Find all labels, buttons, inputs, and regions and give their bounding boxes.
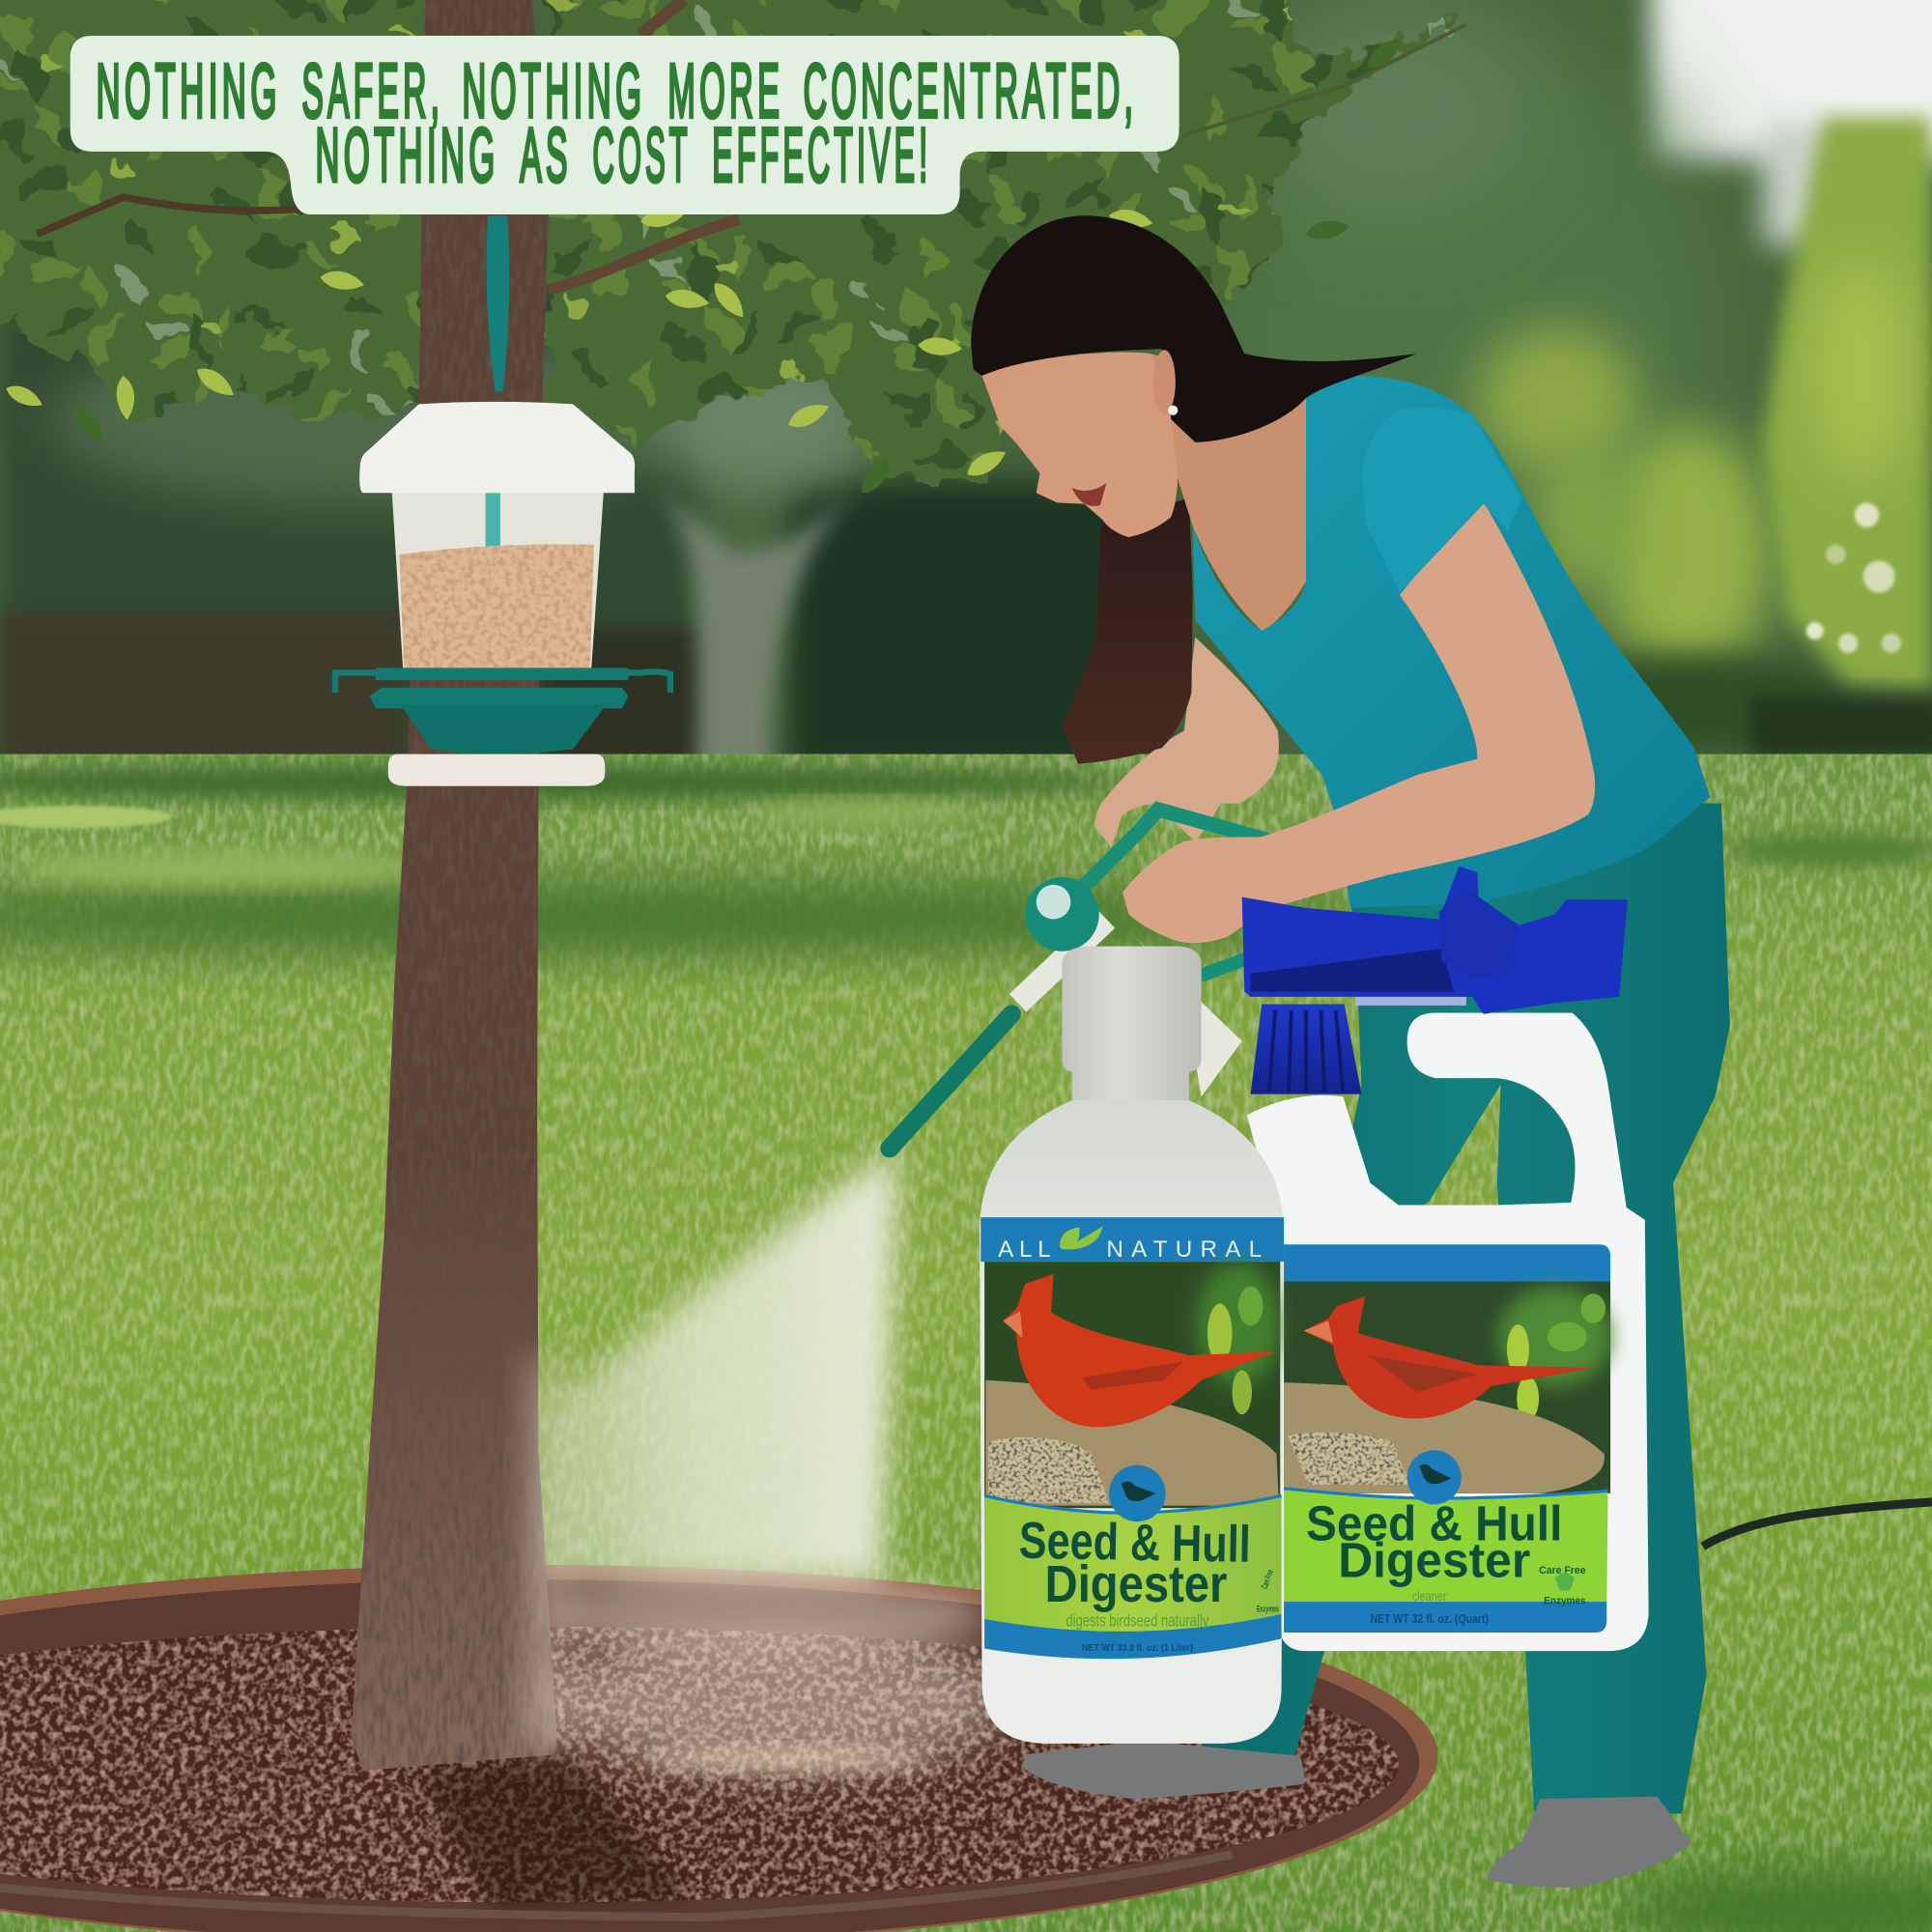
raised arm and hand (1122, 501, 1595, 943)
tree trunk (352, 0, 557, 1771)
lime hedge at right (1762, 117, 1932, 690)
feeder lid (359, 402, 635, 493)
shirt sleeve (1361, 408, 1521, 593)
bottle label: Care Free (1260, 1568, 1275, 1590)
headline text: NOTHING (462, 47, 645, 133)
all natural text: ALL (998, 1236, 1056, 1263)
face (982, 353, 1178, 537)
label heading: Seed & Hull (1306, 1495, 1562, 1550)
quart jug bottle (1242, 867, 1649, 1651)
text: CONCENTRATED, (804, 47, 1137, 133)
headline text (96, 47, 1137, 198)
tree foliage (0, 0, 1466, 498)
jug label: Enzymes (1544, 1596, 1586, 1607)
bottle cap (1062, 947, 1202, 1103)
smile (1072, 483, 1106, 506)
headline text: SAFER, (301, 47, 443, 133)
bird feeder (335, 215, 670, 786)
cardinal (1303, 1296, 1595, 1418)
woman spraying (890, 215, 1932, 1888)
bottle label: NATURAL (1106, 1236, 1269, 1263)
jug label: NET WT 32 fl. oz. (Quart) (1370, 1611, 1489, 1626)
centre foliage mass (542, 0, 1466, 480)
seed fill (399, 544, 594, 668)
background: blurred garden (0, 0, 1932, 813)
bottle body (980, 1100, 1284, 1744)
cardinal (1003, 1274, 1275, 1427)
bottle label (980, 1217, 1284, 1659)
long hair (1062, 497, 1193, 764)
bird badge (1109, 1465, 1166, 1521)
jug label: Digester (1338, 1533, 1530, 1588)
green tray (335, 671, 670, 693)
headline text: MORE (668, 47, 783, 133)
headline banner (71, 36, 1179, 214)
pants (1202, 801, 1730, 1814)
upper hair (971, 215, 1417, 442)
headline text: NOTHING (316, 111, 499, 197)
white base disc (388, 754, 605, 786)
label heading: Seed & Hull (1018, 1513, 1251, 1574)
headline text: COST (593, 111, 692, 197)
lower blue band (984, 1614, 1282, 1659)
blue neck collar (1251, 1005, 1361, 1094)
left foliage mass (0, 0, 425, 425)
spray mist (524, 1149, 1010, 1772)
mulch (0, 1627, 1399, 1902)
front rim highlight (0, 1855, 1233, 1918)
label leaves (1498, 1288, 1611, 1386)
label picture (984, 1262, 1280, 1508)
shoes (1023, 1741, 1304, 1799)
bottle label: Enzymes (1257, 1604, 1279, 1613)
label small print: digests birdseed naturally (1065, 1611, 1208, 1631)
background tree trunk (653, 487, 856, 813)
near arm and hand (1094, 637, 1279, 848)
bottle label: NET WT 33.9 fl. oz. (1 Liter) (1082, 1643, 1193, 1654)
mulch bed with edging (0, 1565, 1438, 1932)
label dish (1284, 1382, 1605, 1493)
top blue band (980, 1217, 1284, 1262)
headline text: EFFECTIVE! (712, 111, 931, 197)
green band (984, 1495, 1282, 1634)
trunk shadow (419, 1749, 690, 1910)
lawn (0, 754, 1932, 1932)
bird badge (1407, 1450, 1462, 1504)
jug label (1284, 1244, 1611, 1633)
garden hose (1703, 1502, 1932, 1547)
jug body and handle (1247, 1012, 1649, 1651)
bottle label: Digester (1045, 1556, 1228, 1613)
hanging strap (487, 215, 509, 392)
shirt (1193, 376, 1710, 908)
label dish (985, 1380, 1279, 1506)
headline text: AS (520, 111, 572, 197)
edging rim (0, 1565, 1438, 1932)
headline text: NOTHING (96, 47, 281, 133)
seed tube (392, 491, 604, 668)
label small print: cleaner (1412, 1588, 1447, 1604)
blue sprayer head (1242, 867, 1628, 1014)
green band (1284, 1489, 1608, 1605)
jug label: Care Free (1539, 1565, 1586, 1577)
sprayer (890, 810, 1260, 1149)
neck and chest (1151, 354, 1306, 631)
one litre bottle (980, 947, 1284, 1744)
ear and earring (1153, 350, 1176, 414)
